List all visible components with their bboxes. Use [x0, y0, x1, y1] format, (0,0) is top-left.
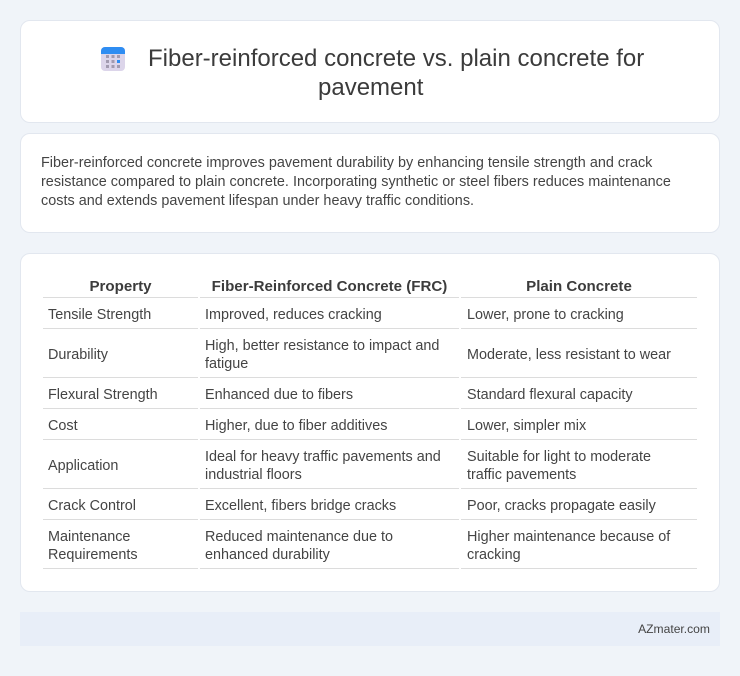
- summary text: resistance compared to plain concrete. Incorporating synthetic or steel fibers reduces maintenance: [41, 174, 671, 190]
- row: maintenance requirements: Maintenance: [48, 529, 130, 545]
- footer bar: [20, 612, 720, 646]
- footer source text: AZmater.com: [638, 622, 710, 636]
- icon: calendar: [101, 47, 125, 71]
- row: tensile strength: Improved, reduces cracking: [205, 307, 382, 323]
- row: durability: fatigue: [205, 356, 248, 372]
- title: pavement: [318, 74, 423, 101]
- row: durability: High, better resistance to impact and: [205, 338, 439, 354]
- row: flexural strength: Flexural Strength: [48, 387, 158, 403]
- row: flexural strength: Standard flexural capacity: [467, 387, 633, 403]
- summary text: [41, 155, 671, 209]
- row: durability: Durability: [48, 347, 108, 363]
- row: maintenance requirements: cracking: [467, 547, 521, 563]
- row: crack control: [48, 498, 656, 514]
- row: cost: Lower, simpler mix: [467, 418, 586, 434]
- summary text: costs and extends pavement lifespan under heavy traffic conditions.: [41, 193, 474, 209]
- summary text: Fiber-reinforced concrete improves pavement durability by enhancing tensile strength and crack: [41, 155, 652, 171]
- row: cost: Higher, due to fiber additives: [205, 418, 387, 434]
- title: Fiber-reinforced concrete vs. plain concrete for: [148, 45, 644, 72]
- row: flexural strength: Enhanced due to fibers: [205, 387, 353, 403]
- row: application: traffic pavements: [467, 467, 576, 483]
- title: [148, 45, 644, 101]
- row: flexural strength: [48, 387, 633, 403]
- row: crack control: Crack Control: [48, 498, 136, 514]
- row: application: Suitable for light to moderate: [467, 449, 651, 465]
- row: maintenance requirements: Requirements: [48, 547, 138, 563]
- row: maintenance requirements: Higher maintenance because of: [467, 529, 670, 545]
- row: application: [48, 449, 651, 483]
- panel: summary text card: [20, 133, 720, 233]
- table header: Plain Concrete: [526, 278, 632, 295]
- comparison table: [43, 278, 697, 569]
- row: application: Ideal for heavy traffic pavements and: [205, 449, 441, 465]
- table header: [89, 278, 632, 295]
- row: maintenance requirements: [48, 529, 670, 563]
- row: tensile strength: [48, 307, 624, 323]
- row: cost: [48, 418, 586, 434]
- table header: Property: [89, 278, 152, 295]
- row: application: Application: [48, 458, 118, 474]
- row: tensile strength: Tensile Strength: [48, 307, 151, 323]
- row: crack control: Poor, cracks propagate easily: [467, 498, 656, 514]
- row: maintenance requirements: Reduced maintenance due to: [205, 529, 393, 545]
- row: cost: Cost: [48, 418, 78, 434]
- row: maintenance requirements: enhanced durability: [205, 547, 330, 563]
- row: tensile strength: Lower, prone to cracking: [467, 307, 624, 323]
- panel: comparison table card: [20, 253, 720, 592]
- row: crack control: Excellent, fibers bridge cracks: [205, 498, 396, 514]
- table header: Fiber-Reinforced Concrete (FRC): [212, 278, 447, 295]
- row: durability: Moderate, less resistant to wear: [467, 347, 671, 363]
- panel: title card: [20, 20, 720, 123]
- row: durability: [48, 338, 671, 372]
- row: application: industrial floors: [205, 467, 302, 483]
